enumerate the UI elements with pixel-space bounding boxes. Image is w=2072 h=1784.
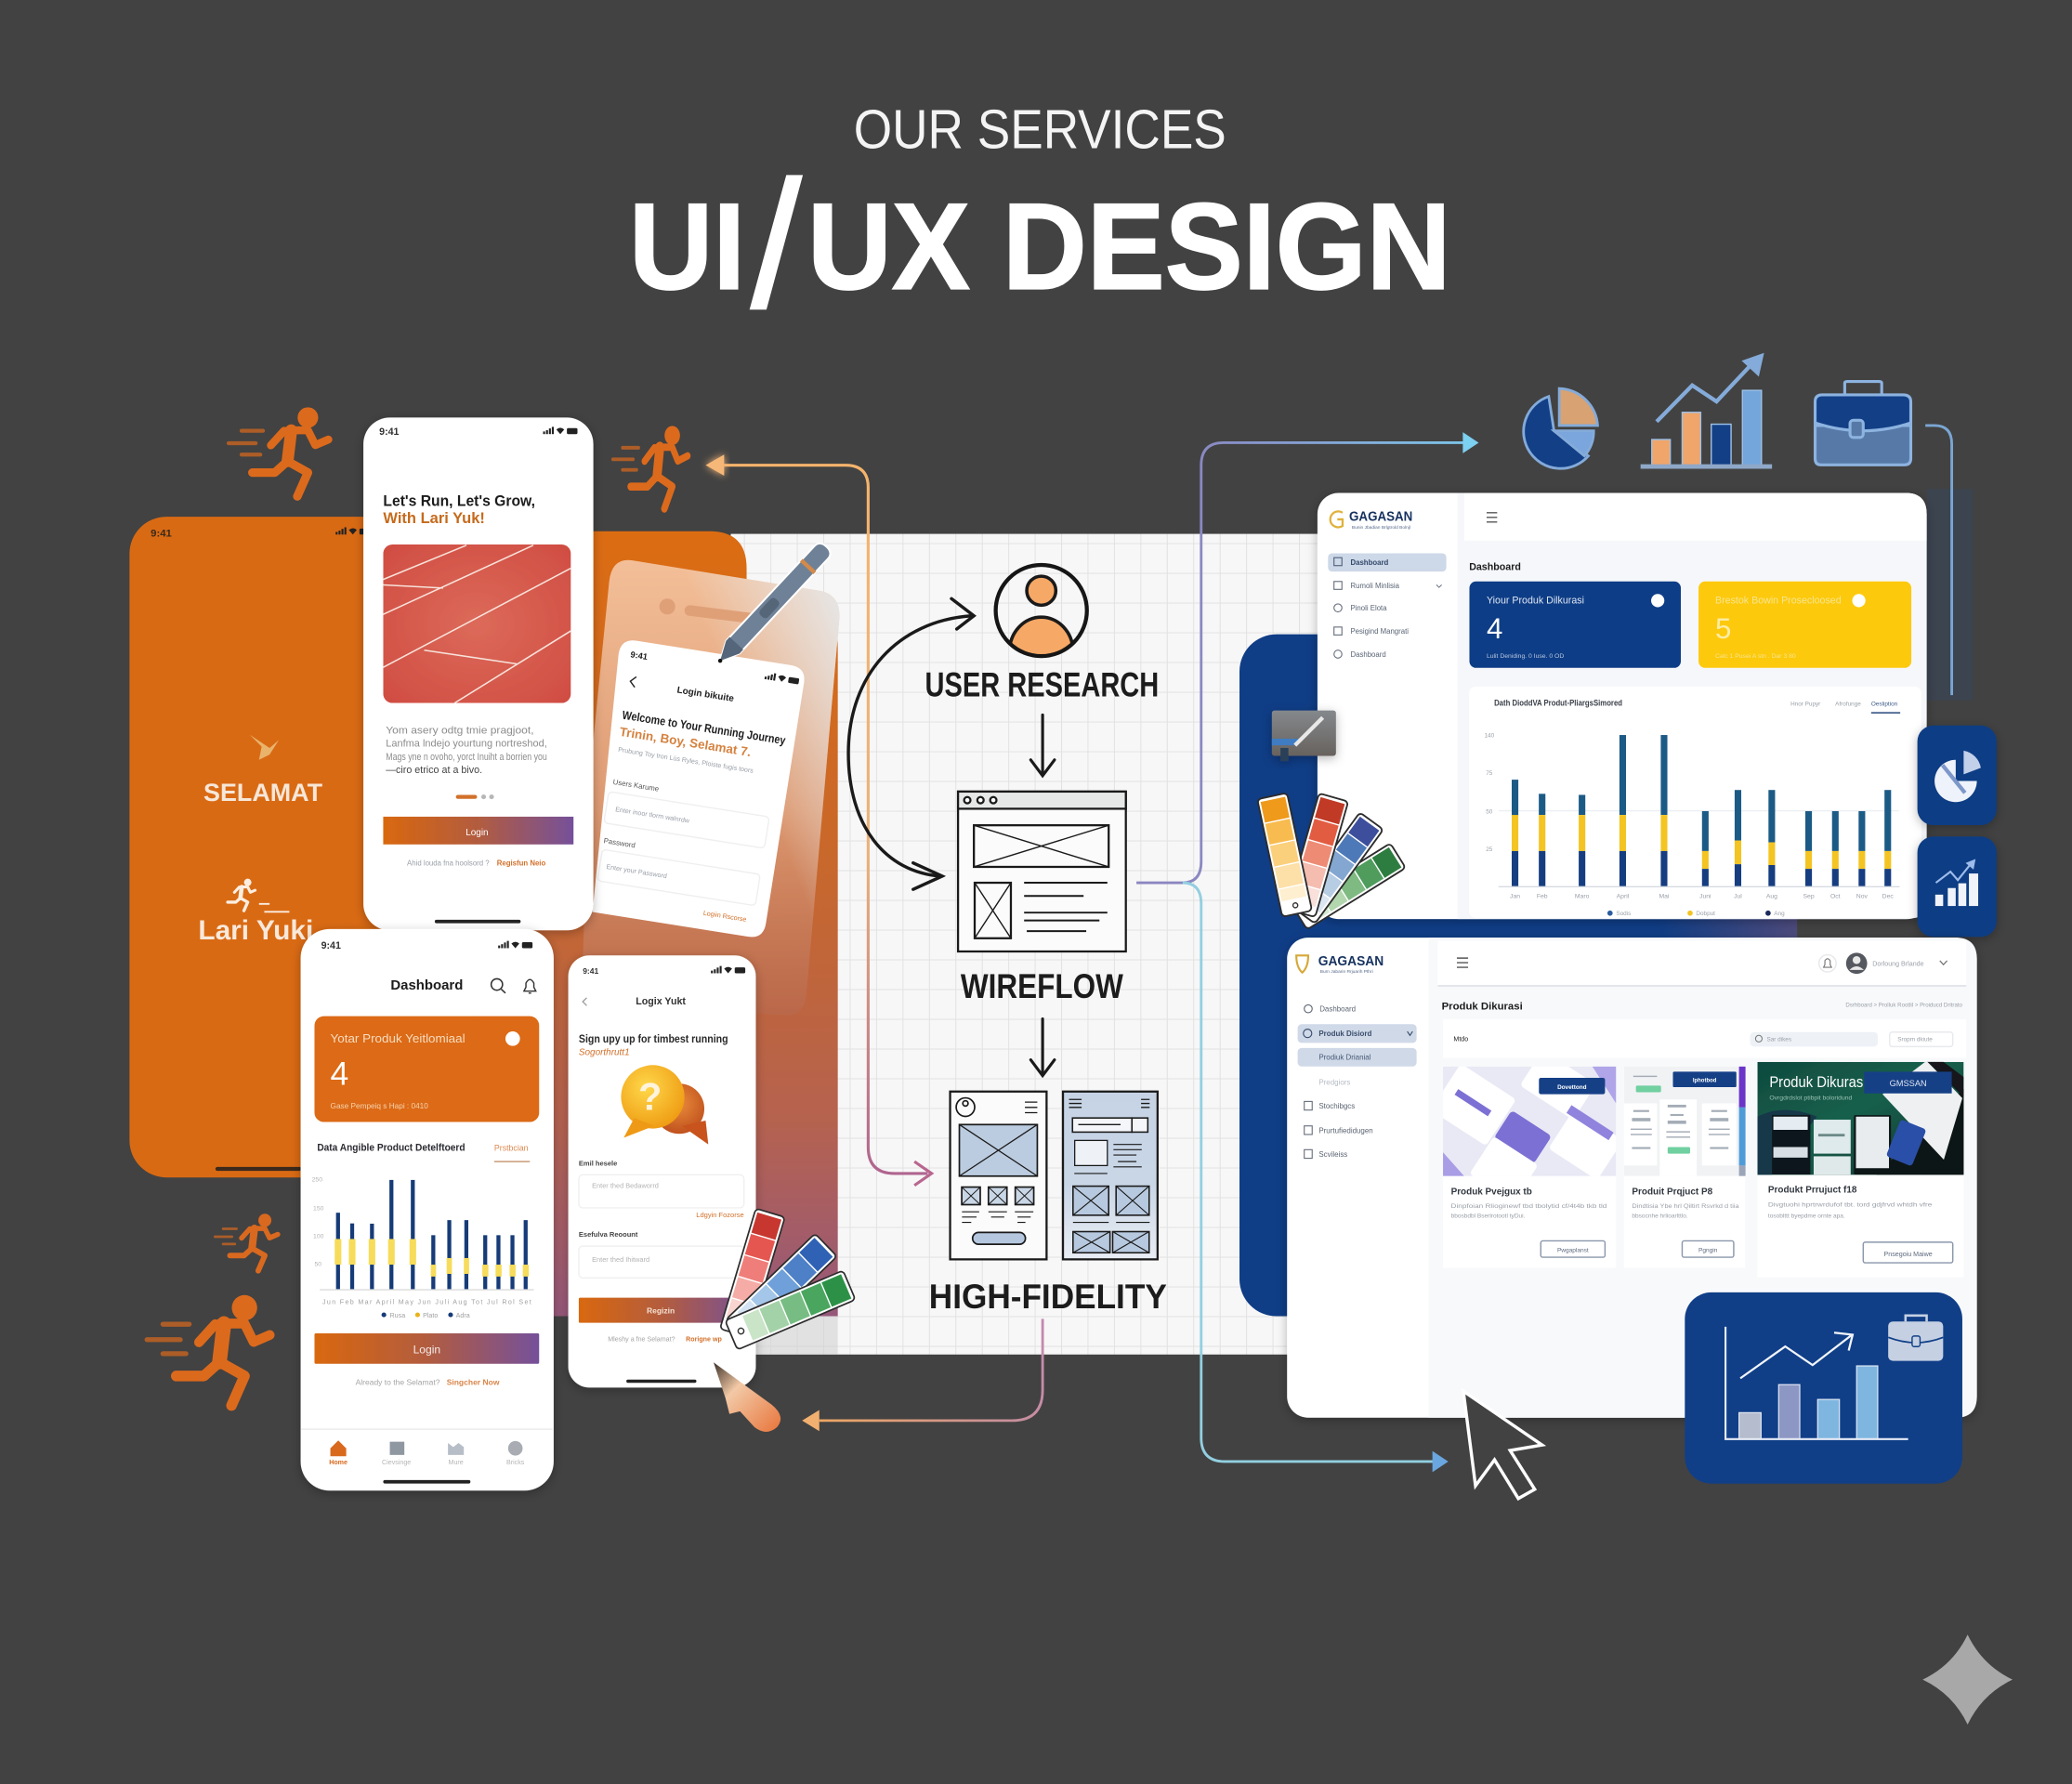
product card 3: Ovrgdrdslot ptibpit boloridund xyxy=(1769,1095,1853,1101)
sparkle watermark xyxy=(1922,1634,2013,1725)
bar chart: monthly products: Juni xyxy=(1699,893,1711,899)
pagination dots xyxy=(456,794,477,799)
sidebar menu: Prurtufiedidugen xyxy=(1318,1127,1373,1135)
panel: desktop dashboard: Oesliption xyxy=(1871,701,1898,707)
product card 1: bbosbdbl Bserlrotootl tyDui. xyxy=(1451,1213,1526,1220)
sidebar menu: Dashboard xyxy=(1350,650,1386,659)
bottom tab bar: Bricks xyxy=(506,1459,525,1466)
phone: dashboard screen: Dashboard xyxy=(390,977,463,993)
phone: sign up screen: Mleshy a fne Selamat? xyxy=(608,1336,675,1344)
icon tile: pie chart xyxy=(1918,726,1997,825)
bar chart: monthly products: 50 xyxy=(1486,808,1493,815)
sidebar menu: Scvileiss xyxy=(1318,1150,1347,1159)
logo: gagasan: GAGASAN xyxy=(1349,508,1412,524)
product card 2: Dindtisia Ybe hrl Qiltirt Rsvrkd d tiia xyxy=(1632,1203,1739,1210)
stat card: navy: Yiour Produk Dilkurasi xyxy=(1487,595,1584,606)
phone: sign up screen: Enter thed Bedaworrd xyxy=(592,1182,659,1190)
product card 3 xyxy=(1758,1061,1969,1278)
phone: sign up screen: Rorigne wp xyxy=(686,1336,722,1344)
product card 3: GMSSAN xyxy=(1890,1079,1927,1088)
bar chart: mobile: Jun Feb Mar April May Jun Juli Aug Tot Jul Rol Set xyxy=(322,1299,531,1306)
product card 3: tosoblttt byepdme ornte apa. xyxy=(1768,1213,1845,1220)
panel: desktop dashboard: Dath DioddVA Produt-PliargsSimored xyxy=(1494,698,1622,707)
bar chart: monthly products: Nov xyxy=(1856,893,1869,899)
faint blue column behind connector xyxy=(1927,489,1973,701)
chart legend xyxy=(382,1312,470,1319)
phone: sign up screen: Enter thed Ihitward xyxy=(592,1255,649,1264)
login button: Login xyxy=(413,1343,440,1356)
panel: navy backdrop xyxy=(1239,635,1797,1317)
translucent phone with login screen xyxy=(578,560,839,1016)
step: wireflow: WIREFLOW xyxy=(961,967,1123,1005)
phone: dashboard screen: Singcher Now xyxy=(447,1377,500,1386)
rotated login card: Welcome to Your Running Journey xyxy=(622,708,787,747)
headline: UI/UX design: / xyxy=(752,144,802,345)
bottom tab bar: Cievsinge xyxy=(382,1459,411,1466)
product card 1: Dovettond xyxy=(1557,1084,1587,1091)
body text xyxy=(386,725,547,776)
product card 2: Pgngin xyxy=(1698,1247,1718,1253)
sidebar menu: Pinoli Elota xyxy=(1350,604,1387,612)
rotated login card: Enter inoor tlorm walnrdw xyxy=(615,806,690,825)
icon: peach cursor xyxy=(714,1362,780,1432)
icon tile: growth chart xyxy=(1918,836,1997,937)
chart legend: Ang xyxy=(1774,911,1785,917)
chart card xyxy=(1469,687,1921,918)
icon: hamburger xyxy=(1457,958,1468,967)
sidebar menu: Pesigind Mangrati xyxy=(1350,627,1409,636)
toolbar with search: Sar dikes xyxy=(1766,1037,1791,1043)
bar chart: monthly products: Oct xyxy=(1830,893,1841,899)
icon: briefcase xyxy=(1816,382,1910,465)
body text: Mags yne n ovoho, yorct Inuiht a borrien you xyxy=(386,752,547,763)
arrow: down to wireflow xyxy=(1030,715,1055,776)
sidebar menu: Prodiuk Drianial xyxy=(1318,1054,1371,1062)
bar chart: mobile xyxy=(312,1176,534,1319)
icon: colour swatch fan, mobile xyxy=(720,1209,856,1350)
login button xyxy=(383,817,573,845)
product card 2: bbsocnhe hrlioarlttlo. xyxy=(1632,1213,1688,1220)
panel: orange splash screen: Lari Yuki xyxy=(198,915,313,946)
step: wireflow xyxy=(958,792,1126,1005)
phone: dashboard screen: 9:41 xyxy=(321,940,341,951)
bar chart: mobile: 100 xyxy=(313,1234,324,1240)
phone: sign up screen: Sign upy up for timbest running xyxy=(579,1032,728,1045)
step: high fidelity: HIGH-FIDELITY xyxy=(929,1278,1167,1316)
sidebar menu xyxy=(1298,1004,1417,1159)
icon: desktop wireframe xyxy=(1063,1092,1158,1259)
step: user research xyxy=(925,565,1159,704)
icon: bell xyxy=(524,979,536,993)
chart legend: Rusa xyxy=(390,1312,405,1319)
bar chart: monthly products xyxy=(1484,733,1900,917)
logo: gagasan: Bunin Jbadian Brlgtrold Bolnjl xyxy=(1352,525,1410,531)
phone: sign up screen: Emil hesele xyxy=(579,1159,617,1167)
stat card: yellow: Brestok Bowin Prosecloosed xyxy=(1715,595,1842,606)
stat card: navy xyxy=(1469,582,1681,668)
chart legend: Dobput xyxy=(1696,911,1715,917)
running track photo xyxy=(383,544,570,703)
runner icon: large lower left xyxy=(147,1295,269,1406)
panel: desktop dashboard: Dashboard xyxy=(1469,562,1521,573)
logo: gagasan xyxy=(1331,508,1412,531)
bar chart: monthly products: 25 xyxy=(1486,846,1493,853)
stat card: Gase Pempeiq s Hapi : 0410 xyxy=(331,1102,428,1110)
sidebar menu: Rumoli Minlisia xyxy=(1350,582,1400,590)
sidebar menu: Produk Disiord xyxy=(1318,1030,1371,1038)
eyebrow: our services: OUR SERVICES xyxy=(854,98,1226,160)
arrow: curved loop xyxy=(848,598,974,889)
icon: user avatar xyxy=(994,563,1089,658)
headline: UI/UX design: UI xyxy=(629,178,745,316)
rotated login card: Password xyxy=(603,836,636,849)
stat card: Yotar Produk Yeitlomiaal xyxy=(331,1031,466,1045)
login button xyxy=(579,1298,751,1323)
rotated login card: Trinin, Boy, Selamat 7. xyxy=(619,725,752,759)
bottom tab bar: Home xyxy=(329,1459,348,1466)
bar chart: mobile: 150 xyxy=(313,1206,324,1213)
panel: product dashboard: Produk Dikurasi xyxy=(1442,1002,1523,1013)
phone: onboarding screen: With Lari Yuk! xyxy=(383,509,485,527)
phone: dashboard screen xyxy=(301,929,554,1490)
icon: hamburger menu xyxy=(1487,513,1497,522)
phone: dashboard screen: Prstbcian xyxy=(494,1144,529,1153)
icon: speech bubbles with question mark xyxy=(621,1065,708,1145)
phone: onboarding screen xyxy=(363,417,594,930)
product card 1 xyxy=(1443,1067,1617,1258)
chart legend xyxy=(1607,911,1785,917)
panel: desktop dashboard: Hnor Pupyr xyxy=(1790,701,1821,707)
bottom tab bar: Mure xyxy=(449,1459,464,1466)
toolbar with search: Sropm dkiute xyxy=(1897,1037,1933,1043)
icon: wireframe browser xyxy=(958,792,1126,951)
icon: bird logo xyxy=(250,735,279,760)
panel: product dashboard xyxy=(1287,938,1977,1418)
sidebar menu: Dashboard xyxy=(1350,558,1389,567)
bar chart: monthly products: Mai xyxy=(1659,893,1670,899)
bar chart: monthly products: Maro xyxy=(1575,893,1590,899)
connector: briefcase to dashboard xyxy=(1925,426,1952,695)
panel: grid paper xyxy=(730,534,1321,1355)
phone: sign up screen xyxy=(569,955,755,1387)
phone: dashboard screen: Already to the Selamat? xyxy=(356,1377,440,1386)
logo: gagasan: GAGASAN xyxy=(1318,953,1384,969)
arrow: orange line from mockups to high fidelity xyxy=(705,454,932,1186)
rotated login card: Prubung Toy tron Lüs Ryles, Ploiste fugis toors xyxy=(618,746,754,775)
panel: product dashboard: Dsrhboard > Prolluk Rootlil > Proiducd Dritrato xyxy=(1845,1003,1963,1009)
icon: small briefcase xyxy=(1888,1316,1943,1361)
arrow: blue brace to dashboards xyxy=(1136,432,1478,1472)
bar chart: monthly products: Sep xyxy=(1803,893,1815,899)
arrow: pink line from high fidelity back to mockups xyxy=(802,1318,1043,1431)
stat card: yellow: 5 xyxy=(1715,612,1731,645)
sidebar menu: Stochibgcs xyxy=(1318,1102,1355,1110)
panel: orange splash screen xyxy=(129,517,526,1177)
phone: onboarding screen: 9:41 xyxy=(379,426,400,438)
icon: speech bubbles with question mark: ? xyxy=(638,1076,662,1119)
rotated login card: Users Karume xyxy=(612,778,660,794)
bar chart: monthly products: 75 xyxy=(1486,770,1493,777)
phone: sign up screen: Ldgyin Fozorse xyxy=(696,1211,744,1219)
bar chart: monthly products: Dec xyxy=(1882,893,1894,899)
login button: Regizin xyxy=(647,1306,675,1316)
stat card: 4 xyxy=(331,1056,348,1093)
rotated login card xyxy=(578,638,807,939)
login button: Login xyxy=(466,828,489,838)
icon: large cursor xyxy=(1463,1391,1542,1499)
chart legend: Sodis xyxy=(1616,911,1631,917)
login button xyxy=(314,1333,539,1364)
product card 2 xyxy=(1624,1067,1746,1267)
bar chart: monthly products: Feb xyxy=(1537,893,1548,899)
rotated login card: Enter your Password xyxy=(606,863,667,880)
product card 1: Pwgaplanst xyxy=(1557,1247,1589,1253)
bar chart: monthly products: April xyxy=(1617,893,1630,899)
product card 2: Iphotbod xyxy=(1693,1079,1717,1084)
stat card: navy: 4 xyxy=(1487,612,1502,645)
phone: sign up screen: Logix Yukt xyxy=(636,996,686,1007)
icon: pie chart xyxy=(1524,388,1597,468)
bar chart: monthly products: Jul xyxy=(1734,893,1742,899)
icon: bar chart with trend arrow xyxy=(1641,353,1772,466)
runner icon: top left xyxy=(229,407,328,496)
rotated login card: 9:41 xyxy=(630,649,649,662)
product card 3: Produkt Prrujuct f18 xyxy=(1768,1186,1857,1196)
stat card: navy: Lulit Deniding. 0 Iuse. 0 OD xyxy=(1487,653,1564,660)
product card 2: Produit Prqjuct P8 xyxy=(1632,1187,1713,1198)
title xyxy=(629,98,1451,345)
phone: dashboard screen: Data Angible Product Detelftoerd xyxy=(317,1143,466,1154)
sidebar menu: Dashboard xyxy=(1319,1005,1356,1014)
stat card: yellow: Calc 1 Pusei A stn . Dar 3 80 xyxy=(1715,653,1796,660)
bar chart: monthly products: Aug xyxy=(1766,893,1777,899)
body text: —ciro etrico at a bivo. xyxy=(386,765,482,776)
icon: white runner xyxy=(228,879,289,912)
panel: orange mauve backdrop xyxy=(522,531,838,1317)
heading: Let's Run, Let's Grow, xyxy=(383,492,535,510)
body text: Yom asery odtg tmie pragjoot, xyxy=(386,725,534,736)
headline: UI/UX design: UX DESIGN xyxy=(807,178,1451,316)
step: user research: USER RESEARCH xyxy=(925,666,1159,704)
product card 3: Produk Dikuras xyxy=(1769,1073,1863,1091)
rotated login card: Logiin Rscorse xyxy=(702,910,747,924)
logo: gagasan: Burn Jabarin Rrjuarih Pthri xyxy=(1320,969,1373,975)
stat card: yellow xyxy=(1698,582,1911,668)
product card 3: Pnsegoiu Maiwe xyxy=(1884,1251,1933,1258)
chart legend: Adra xyxy=(456,1312,470,1319)
product card 1: Dinpfoian Rlioginewf tbd tbolytid cf/4t4b tkb tld xyxy=(1451,1203,1607,1210)
phone: onboarding screen: Ahid louda fna hoolsord ? xyxy=(407,859,490,868)
stat card xyxy=(314,1017,539,1122)
phone: onboarding screen: Regisfun Neio xyxy=(497,859,545,868)
bar chart: mobile: 50 xyxy=(314,1261,321,1267)
phone: sign up screen: Sogorthrutt1 xyxy=(579,1048,630,1058)
user controls xyxy=(1819,952,1947,974)
runner icon: top right xyxy=(613,426,688,508)
bottom tab bar xyxy=(329,1440,525,1466)
logo: gagasan xyxy=(1296,953,1384,975)
phone: sign up screen: 9:41 xyxy=(583,966,598,976)
toolbar with search xyxy=(1443,1019,1966,1057)
sidebar menu: Predgiors xyxy=(1318,1079,1350,1087)
product card 1: Produk Pvejgux tb xyxy=(1451,1187,1532,1198)
pale strip under backdrop xyxy=(755,1317,838,1355)
panel: orange splash screen: 9:41 xyxy=(151,528,172,539)
rotated login card: Login bikuite xyxy=(676,685,735,704)
panel: desktop dashboard: Afrofunge xyxy=(1835,701,1861,707)
arrow: down to high fidelity xyxy=(1030,1019,1055,1076)
panel: orange splash screen: SELAMAT xyxy=(203,779,323,807)
bar chart: monthly products: 140 xyxy=(1484,733,1495,740)
icon: mobile wireframe xyxy=(951,1092,1046,1259)
headline: UI/UX design xyxy=(629,144,1451,345)
bar chart: mobile: 250 xyxy=(312,1176,322,1183)
icon: brush tool tile xyxy=(1272,711,1336,761)
icon: colour swatch fan, dashboard xyxy=(1257,793,1406,929)
product card 3: Divgtuohi hprtrwrdufof tbt. tord gdjfrvd whtdh vfre xyxy=(1768,1201,1933,1208)
chart legend: Plato xyxy=(423,1312,438,1319)
icon: stylus pen xyxy=(712,541,833,669)
body text: Lanfma lndejo yourtung nortreshod, xyxy=(386,739,547,750)
bar chart: monthly products: Jan xyxy=(1510,893,1520,899)
toolbar with search: Mtdo xyxy=(1453,1036,1468,1043)
sidebar menu xyxy=(1328,553,1447,659)
icon: search xyxy=(492,978,505,993)
panel: desktop dashboard xyxy=(1318,492,1927,919)
user controls: Dorloung Brlande xyxy=(1872,961,1924,968)
step: high fidelity xyxy=(929,1092,1167,1316)
phone: sign up screen: Esefulva Reoount xyxy=(579,1230,638,1239)
icon tile: growth chart and briefcase xyxy=(1685,1292,1962,1484)
runner icon: small lower left xyxy=(215,1213,278,1271)
